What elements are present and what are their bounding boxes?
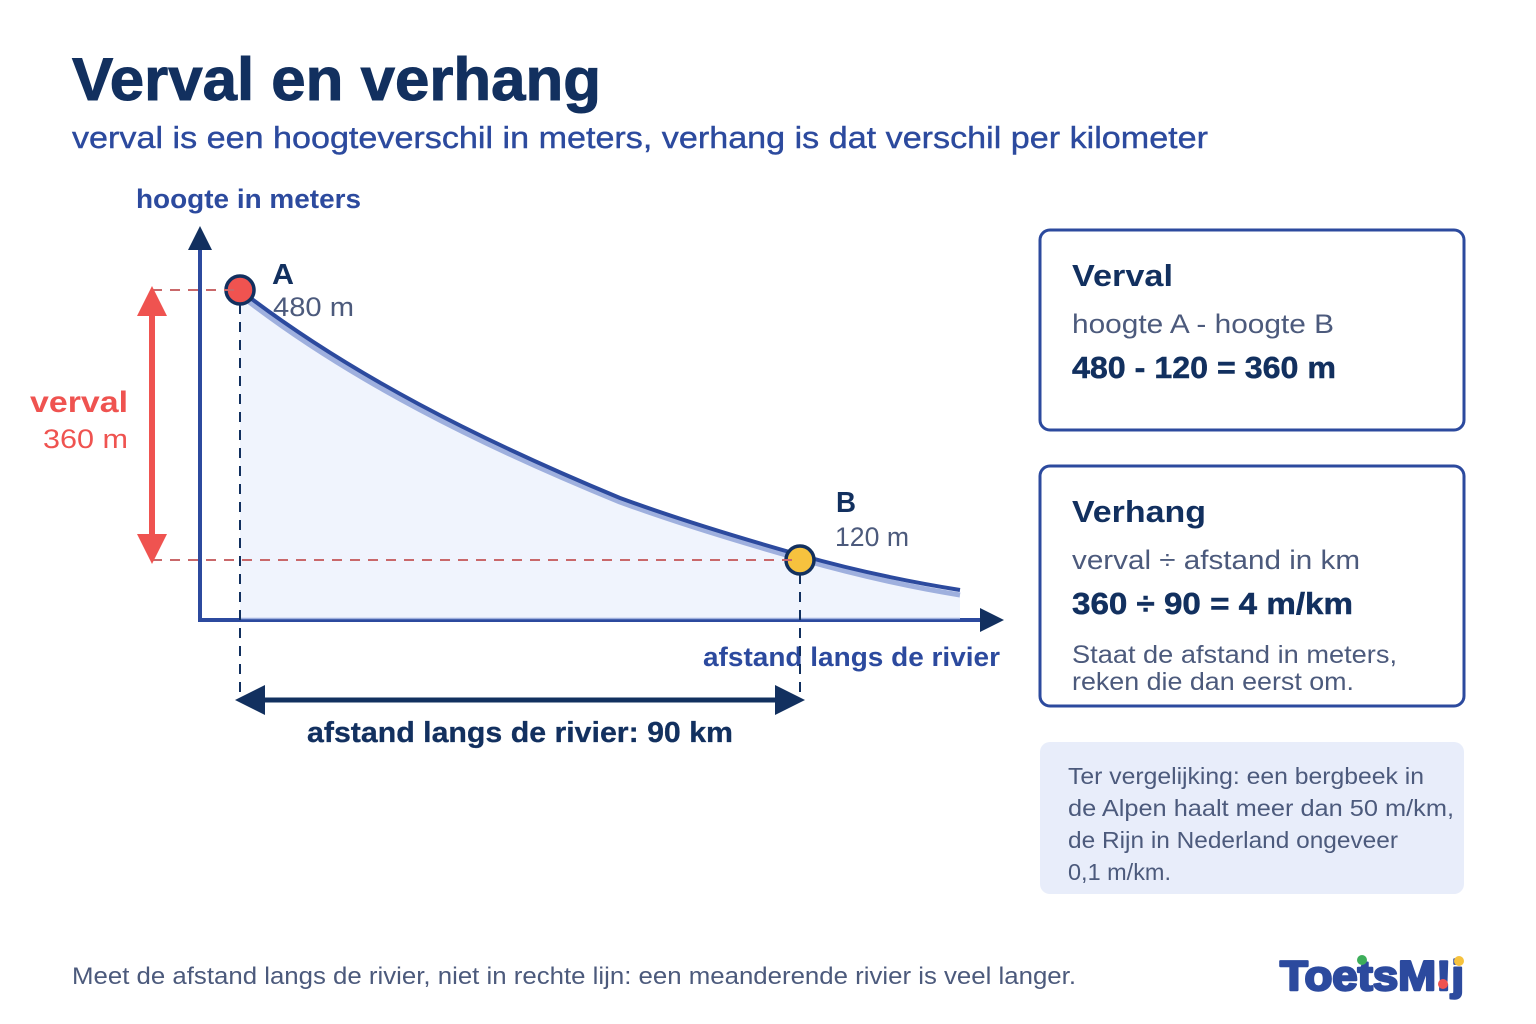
comparison text: de Rijn in Nederland ongeveer — [1068, 827, 1398, 853]
title: Verval en verhang — [72, 46, 601, 113]
panel: verval — [1040, 230, 1464, 430]
logo: ToetsMij: ToetsM!j — [1280, 952, 1464, 999]
point A value: 480 m — [273, 292, 354, 322]
verval formula: hoogte A - hoogte B — [1072, 309, 1334, 339]
verhang calculation: 360 ÷ 90 = 4 m/km — [1072, 586, 1353, 621]
verval value: 360 m — [43, 424, 128, 454]
comparison text: 0,1 m/km. — [1068, 859, 1171, 885]
distance arrow — [235, 685, 805, 715]
verhang formula: verval ÷ afstand in km — [1072, 545, 1360, 575]
point A — [226, 276, 254, 304]
footnote: Meet de afstand langs de rivier, niet in rechte lijn: een meanderende rivier is veel langer. — [72, 963, 1076, 990]
x axis label: afstand langs de rivier — [703, 642, 1000, 672]
verval arrow — [137, 286, 167, 564]
panel: verhang — [1040, 466, 1464, 706]
comparison text: Ter vergelijking: een bergbeek in — [1068, 763, 1424, 789]
verval calculation: 480 - 120 = 360 m — [1072, 350, 1336, 385]
comparison text — [1068, 763, 1454, 885]
subtitle: verval is een hoogteverschil in meters, verhang is dat verschil per kilometer — [72, 120, 1208, 155]
verval label: verval — [30, 386, 128, 419]
distance label: afstand langs de rivier: 90 km — [307, 717, 733, 749]
y axis — [188, 226, 212, 622]
point A label: A — [272, 259, 294, 291]
dashed guides — [152, 290, 800, 692]
verhang note — [1072, 641, 1397, 696]
verval heading: Verval — [1072, 258, 1173, 293]
river line — [240, 290, 960, 590]
y axis label: hoogte in meters — [136, 184, 361, 214]
river shadow line — [244, 298, 960, 595]
point B value: 120 m — [835, 522, 909, 552]
x axis — [198, 608, 1004, 632]
verhang note: reken die dan eerst om. — [1072, 668, 1354, 696]
area under river — [240, 290, 960, 620]
panel: comparison — [1040, 742, 1464, 894]
chart: river profile — [30, 184, 1004, 749]
verhang heading: Verhang — [1072, 494, 1206, 529]
point B — [786, 546, 814, 574]
point B label: B — [836, 487, 856, 519]
comparison text: de Alpen haalt meer dan 50 m/km, — [1068, 795, 1454, 821]
verhang note: Staat de afstand in meters, — [1072, 641, 1397, 669]
